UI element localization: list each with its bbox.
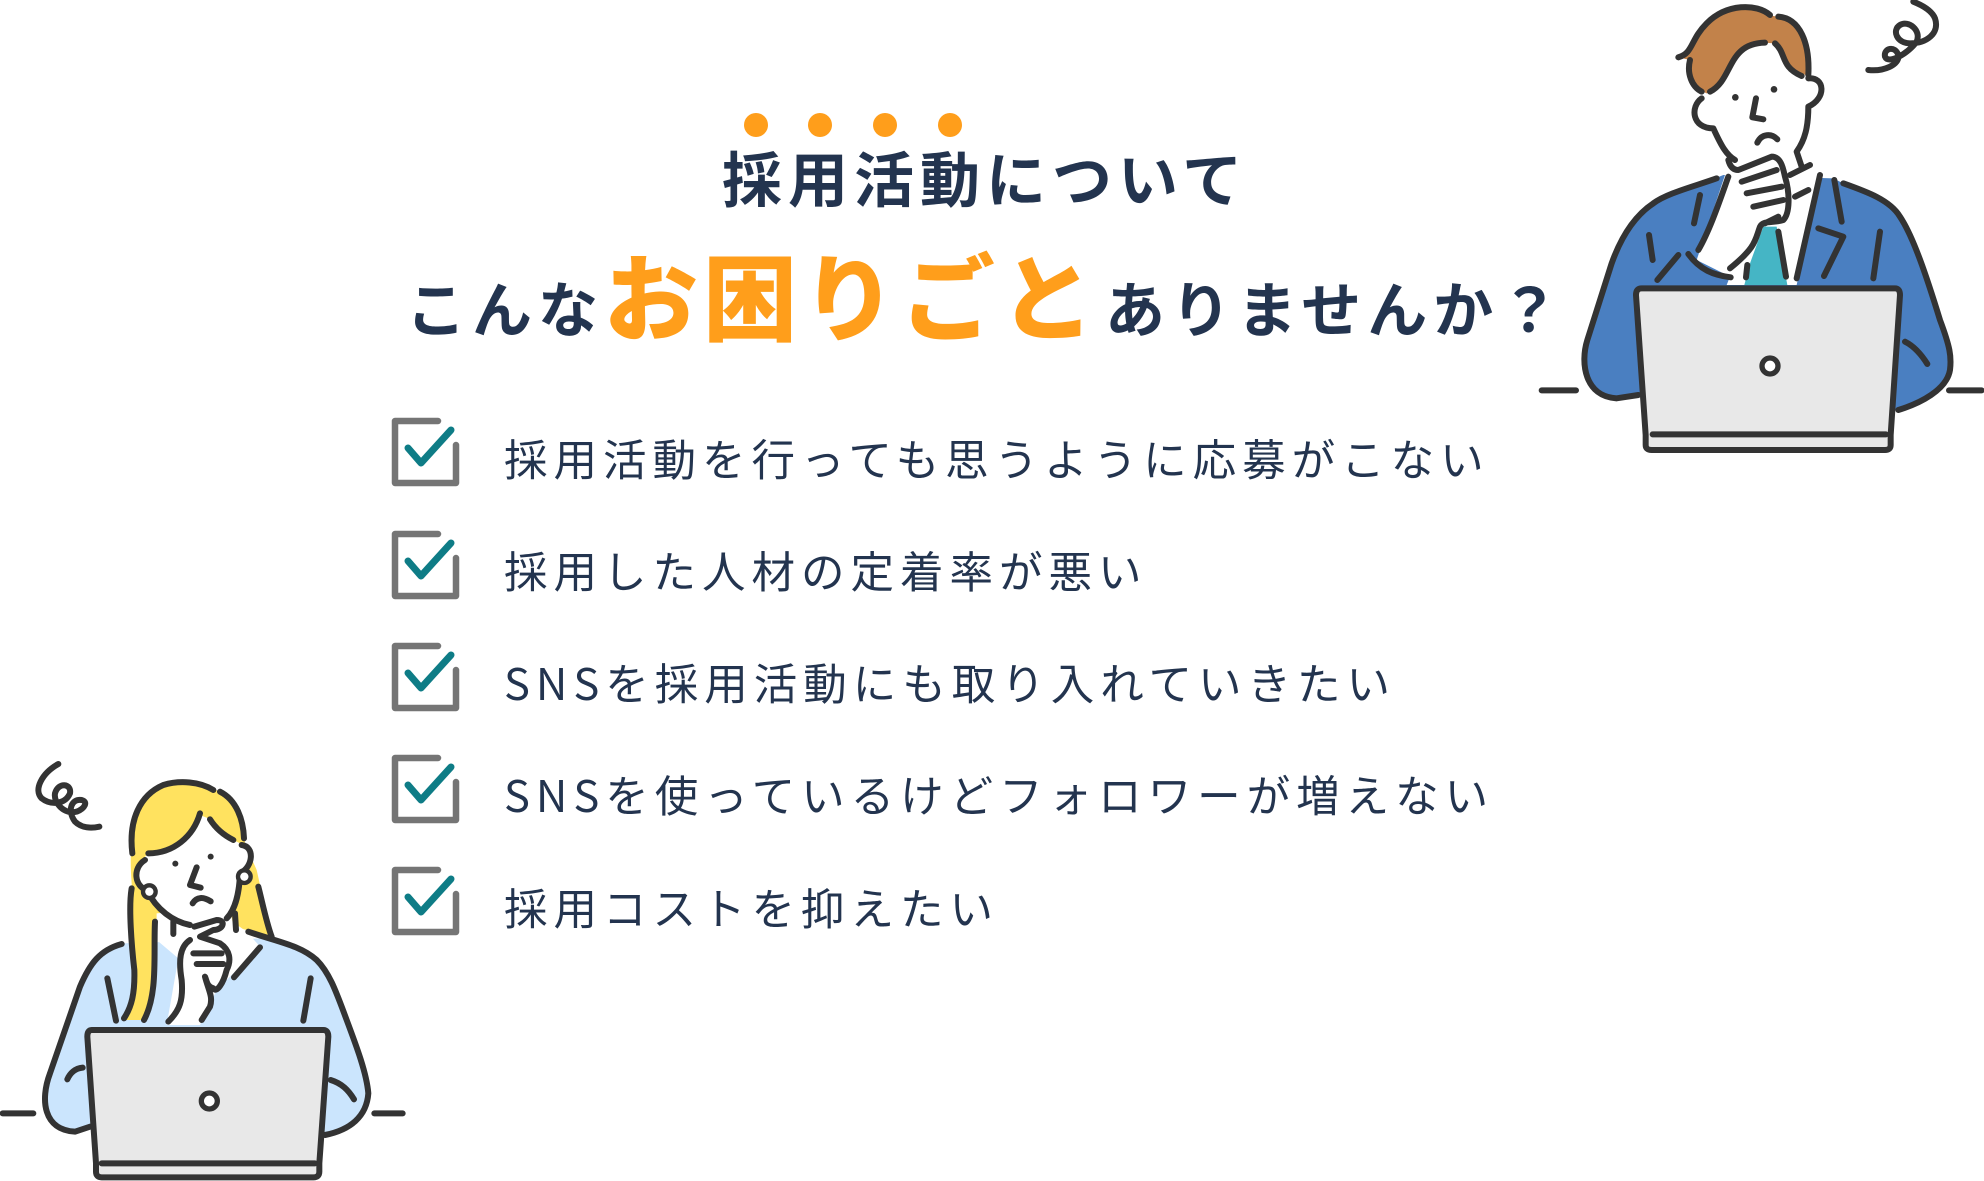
earrings and facial features	[143, 854, 251, 903]
checklist item 1: 採用活動を行っても思うように応募がこない	[504, 426, 1490, 489]
outlines	[45, 782, 368, 1135]
checkbox icon	[395, 421, 456, 483]
heading	[406, 113, 1565, 361]
hair	[1678, 7, 1809, 93]
checkbox icon	[395, 758, 456, 820]
laptop	[87, 1030, 328, 1177]
sweater	[45, 938, 368, 1135]
sweat swirl	[38, 764, 99, 828]
emphasis dots	[744, 113, 962, 137]
checkbox icon	[395, 534, 456, 596]
checklist item 3: SNSを採用活動にも取り入れていきたい	[504, 650, 1396, 713]
outlines	[1584, 7, 1951, 410]
checklist	[395, 421, 1494, 938]
heading line 2: こんな	[406, 263, 604, 350]
heading line 2: お困りごと	[604, 225, 1099, 361]
illustration: man at laptop	[1542, 2, 1982, 450]
face	[136, 815, 252, 925]
jacket	[1584, 175, 1952, 410]
heading line 2: ありませんか？	[1105, 263, 1565, 350]
shirt and hand	[1697, 173, 1820, 285]
illustration: woman at laptop	[3, 764, 403, 1177]
tie	[1744, 227, 1787, 285]
desk lines	[1542, 381, 1982, 399]
heading line 1: 採用活動について	[722, 133, 1248, 220]
checklist item 4: SNSを使っているけどフォロワーが増えない	[504, 762, 1494, 825]
hair	[123, 783, 272, 1020]
checklist item 5: 採用コストを抑えたい	[504, 875, 999, 938]
checkbox icon	[395, 646, 456, 708]
laptop	[1636, 288, 1900, 450]
eyes	[1732, 86, 1777, 101]
checkbox icon	[395, 870, 456, 932]
shirt collar and hand	[157, 920, 260, 1025]
face	[1694, 43, 1821, 162]
sweat swirl	[1868, 2, 1936, 70]
checklist item 2: 採用した人材の定着率が悪い	[504, 538, 1148, 601]
desk lines	[3, 1104, 403, 1122]
